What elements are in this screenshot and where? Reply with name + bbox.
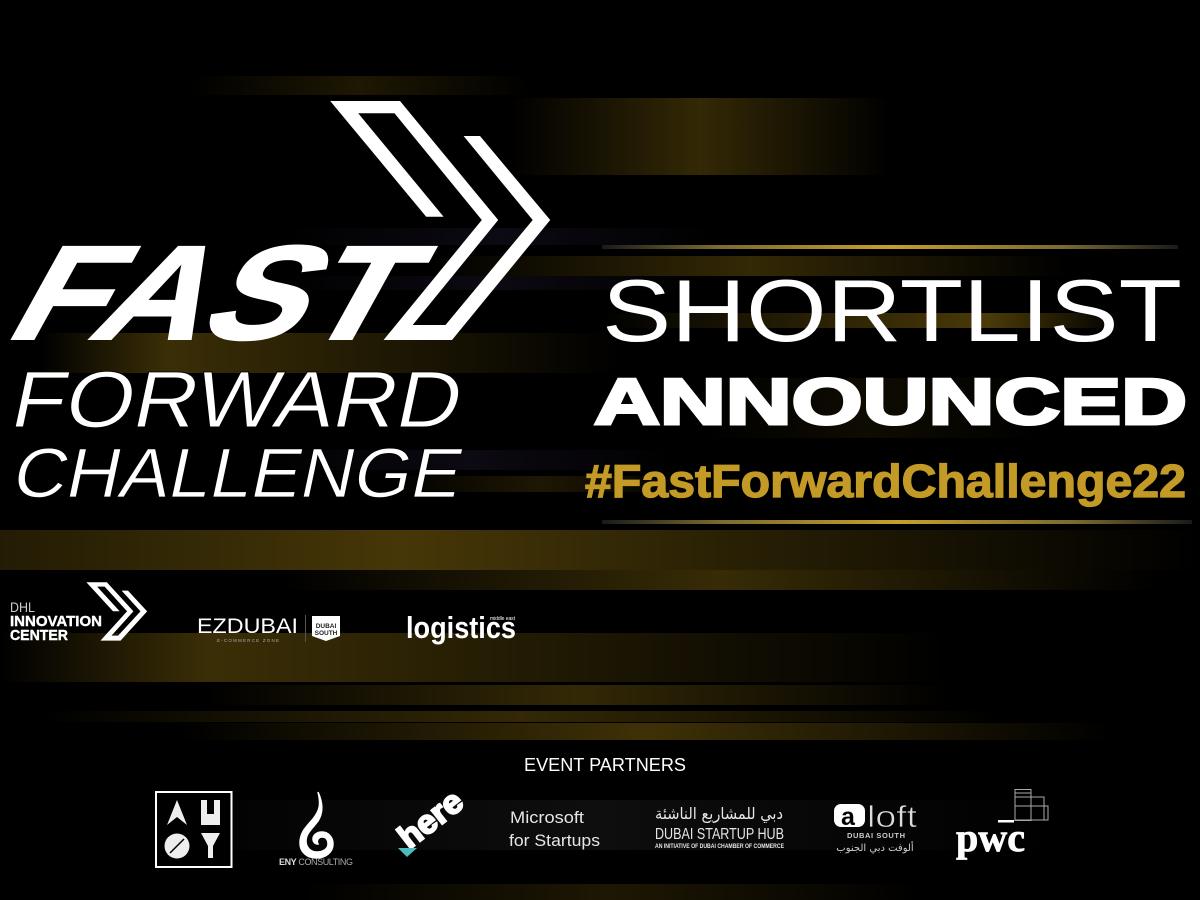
heading: SHORTLIST: SHORTLIST (602, 261, 1182, 360)
gold rule top (602, 245, 1178, 249)
logo: ENY Consulting: ENY CONSULTING (279, 857, 353, 867)
hashtag: #FastForwardChallenge22 (585, 455, 1186, 507)
logo: EZ Dubai: E-COMMERCE ZONE (217, 638, 279, 643)
logo: Aloft Dubai South: DUBAI SOUTH (847, 831, 905, 840)
logo: DHL Innovation Center: INNOVATION (10, 614, 102, 630)
logo: EZ Dubai (197, 615, 340, 643)
logo: logistics middle east: logistics (406, 610, 516, 645)
logo: Microsoft for Startups: Microsoft (510, 808, 584, 827)
logo: PwC: pwc (956, 815, 1025, 860)
logo: Aloft Dubai South: ألوفت دبي الجنوب (836, 841, 914, 854)
logo: DHL Innovation Center (10, 583, 146, 644)
logo: EZ Dubai: DUBAI (316, 623, 336, 630)
logo: DHL Innovation Center: CENTER (10, 628, 69, 644)
logo: here: here (391, 782, 470, 856)
logo: PwC (956, 790, 1048, 860)
logo: EZ Dubai: SOUTH (315, 630, 338, 637)
icon: small chevron (88, 583, 146, 640)
icon: Dubai South shield (312, 616, 340, 641)
gold rule bottom (602, 520, 1192, 524)
logo: EZ Dubai: EZDUBAI (197, 615, 298, 638)
logo: Dubai Startup Hub (655, 804, 784, 850)
logo: Dubai Startup Hub: دبي للمشاريع الناشئة (655, 804, 783, 824)
heading: event partners: EVENT PARTNERS (524, 755, 686, 775)
icon: flame swirl (300, 792, 333, 858)
heading: ANNOUNCED: ANNOUNCED (594, 365, 1187, 438)
logo: Microsoft for Startups (509, 808, 600, 850)
logo: ENY Consulting (279, 792, 353, 867)
wordmark: CHALLENGE: CHALLENGE (7, 434, 470, 512)
logo: Microsoft for Startups: for Startups (509, 831, 600, 850)
wordmark: FORWARD: FORWARD (4, 356, 471, 445)
logo: Aloft Dubai South (834, 799, 917, 854)
logo: Fast Forward Challenge (0, 101, 550, 512)
logo: logistics middle east: middle east (490, 616, 516, 622)
logo: Ahoy (156, 792, 232, 867)
logo: Dubai Startup Hub: AN INITIATIVE OF DUBAI CHAMBER OF COMMERCE (655, 844, 784, 850)
logo: Aloft Dubai South: loft (867, 799, 917, 834)
logo: DHL Innovation Center: DHL (10, 599, 35, 615)
logo: Aloft Dubai South: a (841, 803, 856, 831)
icon: building outline (1015, 790, 1048, 820)
chevron arrow (330, 101, 550, 340)
logo: Dubai Startup Hub: DUBAI STARTUP HUB (655, 826, 784, 843)
